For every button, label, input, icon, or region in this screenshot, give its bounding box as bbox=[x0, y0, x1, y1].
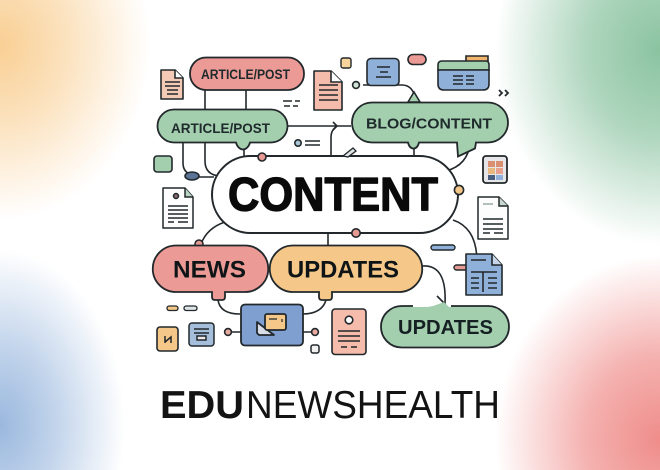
icon: blue pill dash bbox=[431, 245, 455, 250]
icon: small square bbox=[311, 345, 319, 353]
icon: document right bbox=[478, 197, 508, 239]
icon: folder bbox=[438, 56, 489, 90]
icon: orange square tile bbox=[157, 327, 178, 351]
brand: EDUNEWSHEALTH: NEWSHEALTH bbox=[246, 384, 500, 427]
icon: document top centre bbox=[314, 71, 342, 110]
pill: red article/post: ARTICLE/POST bbox=[201, 67, 291, 82]
icon: chevrons bbox=[499, 90, 508, 96]
pill: orange updates bbox=[270, 246, 422, 300]
connector lines bbox=[183, 85, 477, 332]
pill: news: NEWS bbox=[173, 256, 246, 284]
pill: blog/content bbox=[352, 92, 508, 156]
icon: blue tile bbox=[189, 323, 214, 346]
panel: central content pill bbox=[212, 156, 458, 233]
icon: small pills lower left bbox=[167, 306, 197, 310]
icon: small dashes bbox=[283, 101, 300, 106]
icon: document top left bbox=[161, 70, 183, 99]
icon: blue document bbox=[466, 254, 502, 295]
heading: CONTENT: CONTENT bbox=[228, 168, 438, 220]
icon: pen bbox=[343, 148, 356, 157]
pill: blog/content: BLOG/CONTENT bbox=[366, 116, 492, 132]
pill: orange updates: UPDATES bbox=[287, 256, 399, 284]
pill: news bbox=[153, 246, 268, 300]
pill: green article/post: ARTICLE/POST bbox=[171, 120, 270, 136]
pill: green updates bbox=[381, 302, 509, 348]
icon: document left bbox=[163, 188, 193, 228]
icon: small orange square bbox=[341, 58, 351, 68]
icon: blue note bbox=[367, 58, 399, 86]
icon: green square bbox=[154, 156, 172, 172]
icon: blue image card bbox=[241, 304, 303, 346]
connector nodes bbox=[185, 82, 464, 335]
icon: profile card bbox=[332, 309, 366, 354]
icon: small red pill bbox=[408, 54, 426, 64]
pill: red article/post bbox=[190, 58, 304, 90]
icon: circle and lines bbox=[305, 141, 320, 145]
pill: green updates: UPDATES bbox=[398, 316, 493, 339]
brand: EDUNEWSHEALTH: EDU bbox=[160, 384, 244, 427]
pill: green article/post bbox=[158, 110, 288, 150]
icon: red pill dash bbox=[454, 265, 468, 270]
icon: table grid bbox=[483, 156, 507, 183]
